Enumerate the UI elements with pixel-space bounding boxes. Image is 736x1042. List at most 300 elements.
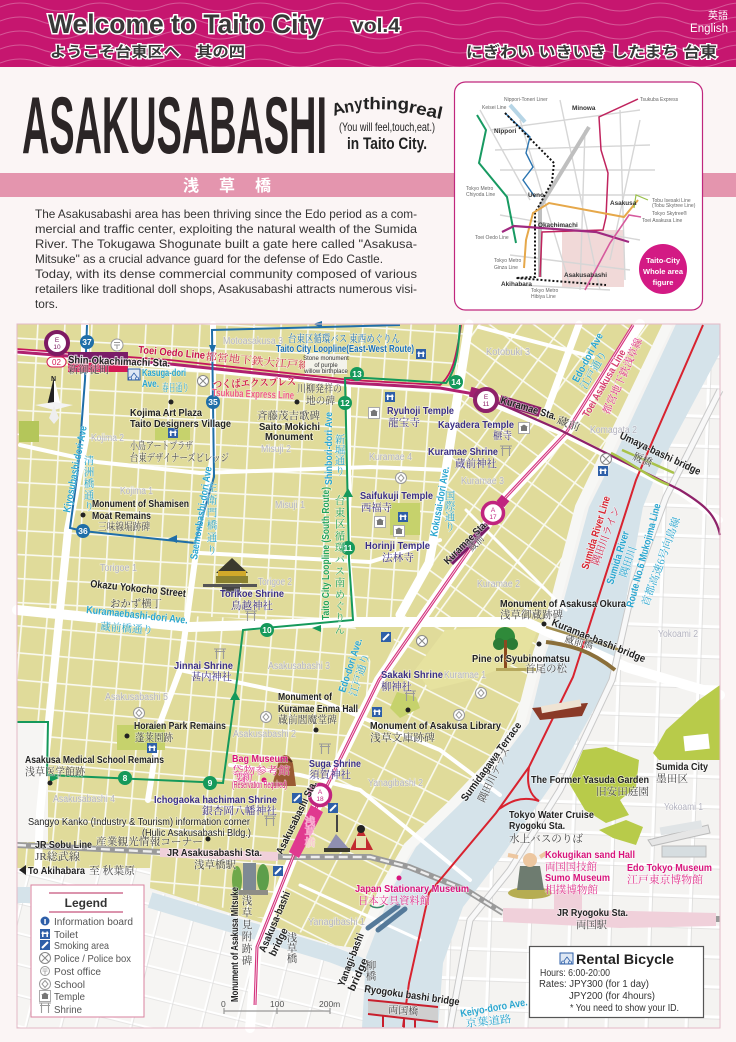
- JR stations: [160, 848, 716, 928]
- place: Sangyo Kanko information corner: [28, 816, 251, 848]
- place: Saito Mokichi Monument: Saito Mokichi: [259, 421, 320, 433]
- district names: Torigoe 2: [258, 577, 292, 588]
- district names: [53, 336, 703, 928]
- JR Asakusabashi Sta. label: JR Asakusabashi Sta.: [167, 847, 262, 859]
- header slogan: にぎわい いきいき したまち 台東: [466, 43, 717, 61]
- inset badge: Taito-City: [646, 256, 681, 265]
- illustration: Edo Tokyo Museum: [648, 820, 710, 857]
- road labels: Kiyosubashi-dori Ave: [61, 425, 90, 514]
- intro text: The Asakusabashi area has been thriving since the Edo period as a com-: [35, 208, 417, 221]
- inset map: Taito City whole area: Tokyo Metro: [531, 288, 558, 294]
- place: Kokugikan sand Hall and Sumo Museum: Sumo Museum: [545, 872, 610, 884]
- legend: temple: Temple: [54, 991, 85, 1003]
- place: Saifukuji Temple: [360, 490, 433, 514]
- place: The Former Yasuda Garden: [531, 774, 649, 798]
- rental details: Rates: JPY300 (for 1 day): [539, 979, 649, 990]
- place: Japan Stationary Museum: [355, 883, 469, 907]
- Kuramae-bashi bridge: [546, 450, 674, 670]
- place: Edo Tokyo Museum: Edo Tokyo Museum: [627, 862, 712, 874]
- place: Monument of Kuramae Enma Hall: Monument of: [278, 691, 332, 703]
- Taito City Loopline East-West route (blue): [70, 321, 400, 543]
- text: ASAKUSABASHI: [22, 81, 327, 171]
- place: Kojima Art Plaza: [130, 407, 231, 464]
- icons: police, school, toilets, smoking: [134, 349, 612, 876]
- station: Asakusabashi A18: Asakusabashi Sta.: [274, 779, 320, 856]
- place: Yanagi-bashi bridge: 柳橋: [364, 959, 376, 982]
- road labels: 春日通り: [162, 381, 189, 394]
- intro text: River. The Tokugawa Shogunate built a gate here called "Asakusa-: [35, 238, 417, 251]
- road labels: [61, 331, 610, 1030]
- place: Kojima Art Plaza: 小島アートプラザ: [130, 439, 193, 452]
- station: Shin-Okachimachi: Shin-Okachimachi Sta.: [68, 354, 170, 370]
- icon: compass: N: [51, 376, 56, 383]
- station: Kuramae E11: E: [484, 394, 489, 401]
- place: Torikoe Shrine: [220, 588, 284, 612]
- station: Shin-Okachimachi: [46, 332, 170, 376]
- pink title band: 浅草橋: [183, 176, 271, 195]
- illustration: houseboat: [532, 699, 588, 720]
- Sumida River: [362, 324, 720, 1028]
- place: Jinnai Shrine: 甚内神社: [191, 670, 232, 683]
- place: Pine of Syubinomatsu: Pine of Syubinomatsu: [472, 653, 570, 665]
- district names: Asakusabashi 2: [233, 729, 296, 740]
- place: Kayadera Temple: [438, 419, 514, 442]
- place: Tokyo Water Cruise: 水上バスのりば: [509, 832, 584, 845]
- inset map: Taito City whole area: Nippori-Toneri Liner: [504, 97, 548, 103]
- station: Kuramae A17: 17: [489, 514, 497, 521]
- place: Monument of Asakusa Library: Monument of Asakusa Library: [370, 720, 501, 732]
- inset map: Taito City whole area: Akihabara: [501, 281, 532, 288]
- place: Suga Shrine: 須賀神社: [309, 768, 351, 781]
- parks: [19, 421, 720, 845]
- district names: Kuramae 2: [477, 579, 520, 590]
- illustration: Torikoe Shrine portable shrine: [203, 558, 257, 592]
- place: Okazu Yokocho Street: おかず横丁: [110, 597, 162, 610]
- place: Asakusa Medical School Remains: [25, 754, 164, 778]
- route stop numbers: [76, 335, 463, 790]
- language tag: 英語: [708, 9, 728, 22]
- road labels: 江戸通り: [578, 349, 610, 392]
- road labels: 隅田川テラス: [476, 745, 513, 804]
- tagline: thing: [363, 94, 409, 114]
- place: Yanagi-bashi bridge: Yanagi-bashi: [336, 931, 367, 988]
- icon: post office and bicycle: [111, 339, 140, 380]
- map border: [17, 324, 720, 1028]
- tagline: n: [342, 96, 356, 117]
- line labels: 首都高速6号向島線: [639, 515, 683, 608]
- place: Kokugikan sand Hall and Sumo Museum: 相撲博物館: [545, 883, 599, 896]
- inset badge: figure: [653, 278, 673, 287]
- place: Horinji Temple: 法林寺: [382, 551, 415, 564]
- tagline: real: [407, 97, 444, 123]
- inset map: Taito City whole area: Tokyo Skytree®: [652, 210, 687, 217]
- place: Ichogaoka hachiman Shrine: Ichogaoka hachiman Shrine: [154, 794, 277, 806]
- district names: Yokoami 2: [658, 629, 698, 640]
- line labels: [138, 332, 683, 635]
- arrow: To Akihabara: To Akihabara: [28, 865, 85, 877]
- route stop numbers: 37: [82, 337, 92, 347]
- line labels: 台東区循環バス南めぐりん: [334, 494, 345, 635]
- inset map: Taito City whole area: Toei Asakusa Line: [642, 218, 683, 224]
- place: Japan Stationary Museum: Japan Stationary Museum: [355, 883, 469, 895]
- legend: information board: Information board: [54, 916, 133, 928]
- Sumida River Line route: [403, 325, 703, 1027]
- district names: Asakusabashi 5: [105, 692, 168, 703]
- inset map: Taito City whole area: Hibiya Line: [531, 294, 556, 300]
- district names: Kuramae 4: [369, 452, 412, 463]
- place: Senryu monument: [297, 382, 342, 407]
- station: Kuramae E11: 蔵前: [555, 414, 583, 434]
- intro text: retailers like traditional doll shops, Asakusabashi attracts numerous visi-: [35, 283, 417, 296]
- place: Saifukuji Temple: Saifukuji Temple: [360, 490, 433, 502]
- inset map: Taito City whole area: Tsukuba Express: [640, 97, 679, 103]
- place: Ryuhoji Temple: Ryuhoji Temple: [387, 405, 454, 417]
- rental details: Hours: 6:00-20:00: [540, 968, 610, 979]
- road labels: Kokusai-dori Ave.: [428, 465, 452, 538]
- illustration: hina dolls: [324, 815, 373, 852]
- tagline: (You will feel,touch,eat.): [339, 120, 435, 134]
- place: Umaya-bashi bridge: 厩橋: [631, 450, 655, 469]
- place: Ryuhoji Temple: [387, 405, 454, 429]
- place: Monument of Asakusa Mitsuke: [229, 887, 252, 1002]
- place: Monument of Kuramae Enma Hall: 蔵前閻魔堂碑: [278, 713, 337, 726]
- route stop numbers: 9: [208, 778, 213, 788]
- place: Kuramae-bashi bridge: 蔵前橋: [563, 632, 595, 652]
- place: Kayadera Temple: Kayadera Temple: [438, 419, 514, 431]
- JR Asakusabashi Sta. label: 浅草橋駅: [194, 858, 236, 871]
- place: Asakusa-bashi bridge: Asakusa-bashi: [257, 890, 293, 954]
- place: Monument of Shamisen Moat Remains: Monument of Shamisen: [92, 498, 189, 510]
- illustration: pine tree: [493, 627, 536, 671]
- JR Sobu Line label: [35, 839, 92, 863]
- inset badge: Whole area: [643, 267, 684, 276]
- line labels: つくばエクスプレス: [213, 375, 296, 391]
- street map: [17, 321, 720, 1030]
- place: Kuramae Shrine: Kuramae Shrine: [428, 446, 498, 458]
- inset map: Taito City whole area: (Tobu Skytree Line): [652, 203, 696, 209]
- inset map: Taito City whole area: Tobu Isesaki Line: [652, 198, 691, 204]
- scale bar: [221, 999, 340, 1014]
- district names: Asakusabashi 4: [53, 794, 115, 805]
- place: Monument of Asakusa Okura: Monument of Asakusa Okura: [500, 598, 626, 610]
- place: Stone monument of purple willow birthplace: willow birthplace: [303, 369, 349, 375]
- legend: smoking area: Smoking area: [54, 940, 109, 952]
- place: Kojima Art Plaza: Kojima Art Plaza: [130, 407, 202, 419]
- road labels: 左衛門橋通り: [206, 481, 217, 557]
- intro text: [35, 208, 418, 311]
- route stop numbers: 11: [344, 543, 353, 553]
- place: Bag Museum: Bag Museum: [232, 753, 288, 765]
- district names: Misuji 1: [275, 500, 305, 511]
- station: Asakusabashi A18: 18: [316, 796, 324, 803]
- place: Sakaki Shrine: [381, 669, 443, 693]
- place: Sakaki Shrine: Sakaki Shrine: [381, 669, 443, 681]
- inset map: Taito City whole area: Tokyo Metro: [466, 186, 493, 192]
- place: Saito Mokichi Monument: [257, 409, 320, 443]
- south-west blocks: [17, 868, 380, 1028]
- road labels: Sumidagawa Terrace: [459, 720, 524, 804]
- JR Sobu Line label: JR Sobu Line: [35, 839, 92, 851]
- place: Tokyo Water Cruise: Ryogoku Sta.: [509, 820, 565, 832]
- intro text: tors.: [35, 298, 58, 311]
- place: Asakusa-bashi bridge: bridge: [267, 926, 291, 958]
- legend: post office: Post office: [54, 966, 101, 978]
- place: Asakusa Medical School Remains: 浅草医学館跡: [25, 765, 85, 778]
- place: Kayadera Temple: 榧寺: [493, 429, 512, 442]
- rental details: [539, 968, 679, 1014]
- line labels: 隅田川: [617, 545, 639, 579]
- header japanese subtitle: ようこそ台東区へ 其の四: [50, 43, 245, 61]
- JR Sobu Line tracks: [17, 845, 720, 919]
- station: Kuramae A17: A: [491, 507, 496, 514]
- place: Asakusa Medical School Remains: Asakusa Medical School Remains: [25, 754, 164, 766]
- intro text: Today, with its dense commercial community composed of various: [35, 268, 417, 281]
- place: Kojima Art Plaza: Taito Designers Village: [130, 418, 231, 430]
- inset map: Taito City whole area: Toei Oedo Line: [475, 235, 509, 241]
- road labels: 清洲橋通り: [82, 454, 94, 512]
- place: Ryogoku bashi bridge: Ryogoku bashi bridge: [364, 983, 460, 1008]
- icon: compass: [35, 376, 73, 424]
- scale bar: 100: [270, 999, 284, 1009]
- place: Ichogaoka hachiman Shrine: 銀杏岡八幡神社: [202, 804, 278, 817]
- line labels: Route No.6 Mukojima Line: [624, 502, 664, 609]
- route stop numbers: 36: [78, 526, 88, 536]
- route stop numbers: 13: [352, 369, 362, 379]
- volume number: vol.4: [352, 16, 400, 37]
- place: Kokugikan sand Hall and Sumo Museum: Kokugikan sand Hall: [545, 849, 635, 861]
- place: Okazu Yokocho Street: Okazu Yokocho Street: [90, 578, 187, 600]
- station: Kuramae E11: 11: [483, 401, 490, 408]
- station: Shin-Okachimachi: 02: [52, 358, 61, 367]
- place: Bag Museum: （要予約）: [232, 771, 256, 784]
- district names: Yanagibashi 1: [308, 917, 365, 928]
- place: Sangyo Kanko information corner: (Hulic Asakusabashi Bldg.): [142, 827, 251, 839]
- place: Kokugikan sand Hall and Sumo Museum: 両国国技館: [545, 860, 597, 873]
- road labels: 新堀通り: [334, 433, 345, 476]
- place: The Former Yasuda Garden: 旧安田庭園: [596, 785, 649, 798]
- place: Tokyo Water Cruise: [509, 809, 594, 845]
- arrow: To Akihabara: [19, 864, 136, 877]
- Kanda River: [17, 895, 385, 975]
- line labels: Sumida River: [604, 530, 632, 586]
- arrow: To Akihabara: 至 秋葉原: [89, 864, 136, 877]
- illustration: sumo wrestler: [508, 852, 552, 899]
- station: Shin-Okachimachi: 10: [53, 344, 61, 351]
- route stop numbers: 35: [208, 397, 218, 407]
- place: The Former Yasuda Garden: The Former Yasuda Garden: [531, 774, 649, 786]
- place: Kojima Art Plaza: 台東デザイナーズビレッジ: [130, 451, 229, 464]
- Tsukuba Express and Oedo lines: [17, 325, 720, 535]
- place: Horaien Park Remains: [134, 720, 226, 744]
- legend title: Legend: [65, 896, 107, 910]
- place: Bag Museum: 袋物参考館: [232, 764, 291, 777]
- place: Monument of Shamisen Moat Remains: [92, 498, 189, 533]
- place: Asakusa-bashi bridge: 浅草橋: [286, 931, 297, 964]
- place: JR Ryogoku Sta.: [557, 907, 628, 931]
- place: Monument of Asakusa Library: [370, 720, 501, 744]
- scale bar: 0: [221, 999, 226, 1009]
- district names: Yanagibashi 2: [368, 778, 423, 789]
- inset map: Taito City whole area: Ueno: [528, 192, 544, 199]
- place: Senryu monument: 川柳発祥の: [297, 382, 342, 395]
- station: Asakusabashi A18: 浅草橋: [304, 815, 315, 848]
- place: Monument of Kuramae Enma Hall: [278, 691, 358, 726]
- inset map: Taito City whole area: Chiyoda Line: [466, 192, 495, 198]
- place: Torikoe Shrine: 鳥越神社: [231, 599, 273, 612]
- rental details: * You need to show your ID.: [570, 1003, 679, 1014]
- icon: bicycle: [560, 953, 573, 964]
- road labels: 蔵前橋通り: [100, 620, 154, 637]
- place: Torikoe Shrine: Torikoe Shrine: [220, 588, 284, 600]
- panel: rental bicycle: [530, 946, 704, 1018]
- place: Horaien Park Remains: Horaien Park Remains: [134, 720, 226, 732]
- place: Sumida City: Sumida City: [656, 761, 708, 773]
- place: Ryogoku bashi bridge: 両国橋: [388, 1003, 419, 1018]
- line labels: 都営地下鉄大江戸線: [205, 350, 311, 372]
- place: Kuramae Shrine: [428, 446, 498, 470]
- district names: Kotobuki 3: [486, 347, 530, 358]
- line labels: Toei Oedo Line: [138, 344, 206, 362]
- road labels: 京葉道路: [465, 1012, 513, 1030]
- district names: Komagata 2: [590, 425, 637, 436]
- place: Kokugikan sand Hall and Sumo Museum: [545, 849, 635, 896]
- illustration: monument and trees: [232, 863, 269, 895]
- place: Senryu monument: 地の碑: [306, 394, 335, 407]
- tagline: A: [329, 98, 347, 120]
- place: Yanagi-bashi bridge: bridge: [346, 956, 371, 993]
- road labels: Edo-dori Ave: [570, 331, 606, 384]
- place: Edo Tokyo Museum: 江戸東京博物館: [627, 873, 704, 886]
- station: Asakusabashi A18: A: [318, 789, 323, 796]
- line labels: Taito City Loopline(East-West Route): [276, 343, 414, 355]
- place: Saifukuji Temple: 西福寺: [361, 501, 392, 514]
- legend: toilet: Toilet: [54, 929, 78, 941]
- inset badge: [639, 244, 687, 294]
- district names: Kuramae 3: [461, 476, 504, 487]
- route stop numbers: 8: [123, 773, 128, 783]
- legend: shrine: Shrine: [54, 1004, 82, 1016]
- header banner: [0, 0, 736, 67]
- station: Kuramae A17: Kuramae Sta.: [442, 518, 490, 567]
- place: JR Ryogoku Sta.: 両国駅: [576, 919, 607, 931]
- place: Suga Shrine: [309, 758, 361, 781]
- line labels: 都営地下鉄浅草線: [600, 336, 645, 416]
- intro text: Mitsuke" as a crucial advance guard for the defense of Edo Castle.: [35, 253, 383, 266]
- station: Kuramae A17: 蔵前: [465, 532, 487, 554]
- place: JR Ryogoku Sta.: JR Ryogoku Sta.: [557, 907, 628, 919]
- district names: Kojima 2: [91, 433, 124, 444]
- intro text: mercial and traffic center, exploiting the natural wealth of the Sumida: [35, 223, 418, 236]
- panel: legend: [31, 885, 144, 1017]
- district names: Kojima 1: [120, 486, 153, 497]
- place: Monument of Asakusa Library: 浅草文庫跡碑: [370, 731, 436, 744]
- place: Horinji Temple: Horinji Temple: [365, 540, 430, 552]
- Taito City Loopline South route (green): [17, 325, 460, 783]
- place: Horaien Park Remains: 蓬莱園跡: [135, 731, 173, 744]
- place: Sangyo Kanko information corner: Sangyo Kanko (Industry & Tourism) information corner: [28, 816, 250, 828]
- inset map: Taito City whole area: Nippori: [494, 128, 517, 135]
- road labels: 国際通り: [444, 490, 455, 532]
- scale bar: 200m: [319, 999, 340, 1009]
- main roads: [17, 324, 720, 1028]
- route stop numbers: 10: [262, 625, 272, 635]
- legend: police: Police / Police box: [54, 953, 132, 965]
- legend: school: School: [54, 979, 85, 991]
- illustration: writing brushes: [368, 905, 405, 930]
- road labels: Saemonbashi-dori Ave: [188, 466, 215, 560]
- inset map: Taito City whole area: Keisei Line: [482, 105, 507, 111]
- inset map: Taito City whole area: Minowa: [572, 105, 596, 112]
- inset map: Taito City whole area: Asakusa: [610, 200, 637, 207]
- place: Suga Shrine: Suga Shrine: [309, 758, 361, 770]
- district names: Misuji 2: [261, 444, 291, 455]
- inset map: Taito City whole area: Asakusabashi: [564, 272, 607, 279]
- station platform: [289, 805, 323, 858]
- place: Kuramae-bashi bridge: Kuramae-bashi bridge: [550, 617, 647, 665]
- illustration: bag: [272, 755, 296, 786]
- place: Edo Tokyo Museum: [627, 862, 712, 886]
- place: Stone monument of purple willow birthplace: of purple: [314, 363, 338, 369]
- inset map: Taito City whole area: Tokyo Metro: [494, 258, 521, 264]
- district names: Torigoe 1: [100, 563, 137, 574]
- place: Sakaki Shrine: 柳神社: [381, 680, 412, 693]
- inset map: Taito City whole area: Ginza Line: [494, 265, 518, 271]
- pink title band: [0, 173, 736, 197]
- line labels: 隅田川ライン: [590, 505, 623, 567]
- line labels: Taito City Loopline (South Route): [320, 487, 332, 620]
- place: Jinnai Shrine: Jinnai Shrine: [174, 660, 233, 672]
- route stop numbers: 12: [340, 398, 350, 408]
- river bank strip: [358, 324, 668, 948]
- station: Kuramae E11: [469, 387, 583, 434]
- place: Stone monument of purple willow birthplace: [303, 354, 349, 375]
- place: Monument of Shamisen Moat Remains: 三味線堀跡碑: [98, 520, 150, 533]
- station: Kuramae A17: [442, 495, 509, 567]
- place: Ichogaoka hachiman Shrine: [154, 794, 278, 817]
- district names: Yokoami 1: [664, 802, 703, 813]
- JR Sobu Line label: JR総武線: [35, 850, 81, 863]
- JR Asakusabashi Sta. label: [167, 847, 262, 871]
- road labels: Kasuga-dori: [142, 367, 186, 379]
- place: Pine of Syubinomatsu: [472, 653, 570, 675]
- tagline: [329, 94, 444, 153]
- place: Bag Museum: [232, 753, 291, 791]
- place: Okazu Yokocho Street: [90, 578, 187, 610]
- district names: Kuramae 1: [444, 670, 486, 681]
- place: Monument of Kuramae Enma Hall: Kuramae Enma Hall: [278, 703, 358, 715]
- place: Sumida City: [656, 761, 708, 785]
- road labels: 江戸通り: [347, 652, 372, 698]
- Ryogoku bridge: [368, 1000, 438, 1028]
- place: Pine of Syubinomatsu: 首尾の松: [525, 662, 567, 675]
- rental title: Rental Bicycle: [576, 952, 675, 967]
- place: Ryuhoji Temple: 龍宝寺: [388, 416, 421, 429]
- header title: Welcome to Taito City: [48, 9, 322, 39]
- district names: Motoasakusa 3: [223, 336, 283, 347]
- district names: Asakusabashi 3: [268, 661, 330, 672]
- station: Kuramae E11: Kuramae Sta.: [499, 394, 558, 423]
- place: Umaya-bashi bridge: Umaya-bashi bridge: [618, 430, 703, 478]
- place: Saito Mokichi Monument: 斉藤茂吉歌碑: [257, 409, 320, 422]
- east bank blocks: [438, 324, 720, 1028]
- place: Stone monument of purple willow birthplace: Stone monument: [303, 356, 349, 362]
- inset map: Taito City whole area: [454, 82, 702, 310]
- tagline: y: [353, 94, 364, 114]
- place: Japan Stationary Museum: 日本文具資料館: [358, 894, 430, 907]
- place: Sangyo Kanko information corner: 産業観光情報コーナー: [96, 835, 203, 848]
- place: Jinnai Shrine: [174, 660, 233, 683]
- inset map: Taito City whole area: Okachimachi: [538, 222, 578, 229]
